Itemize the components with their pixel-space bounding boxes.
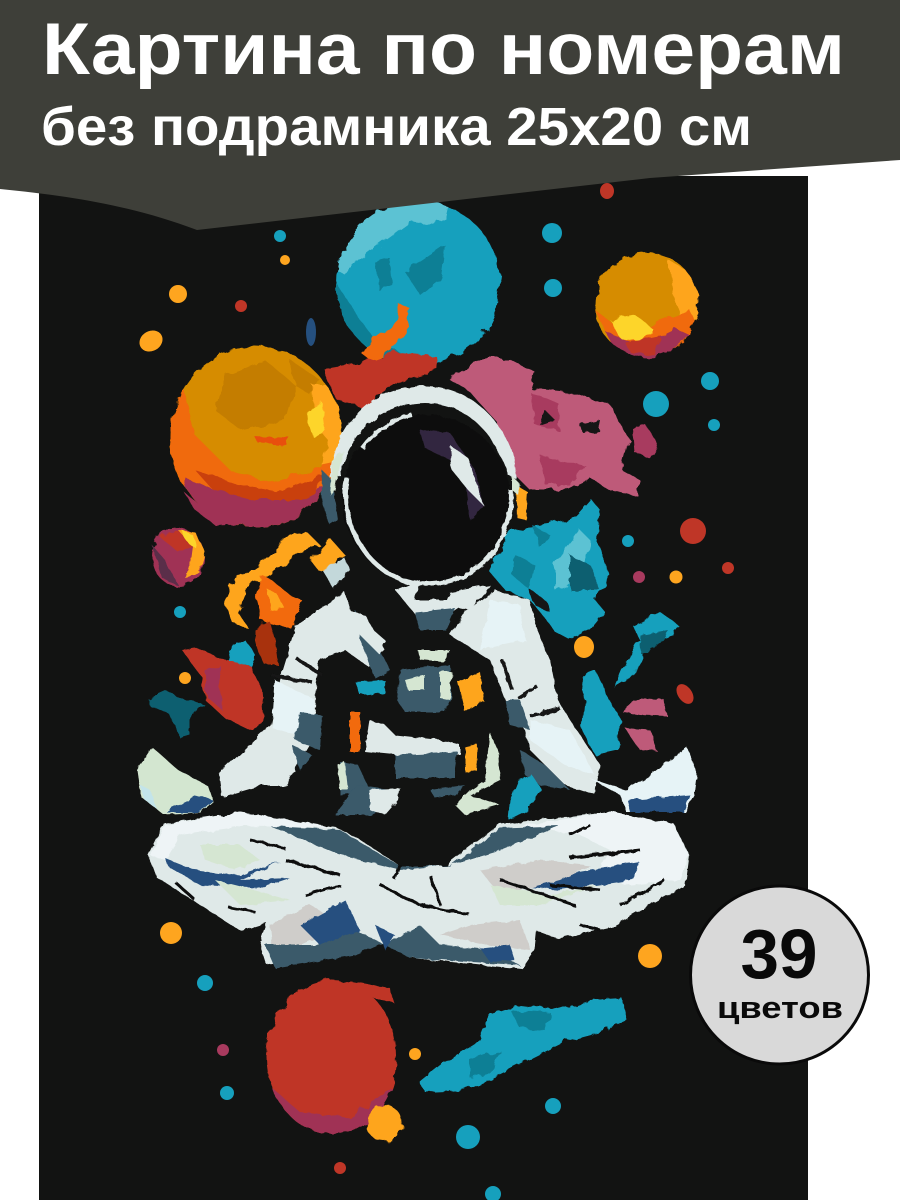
astronaut [137, 386, 698, 969]
nebula: orange left [225, 530, 345, 665]
planet: orange left [170, 344, 342, 528]
header banner [0, 0, 900, 230]
painting: black canvas [39, 176, 808, 1200]
helmet shell [321, 386, 528, 588]
leg highlights [150, 812, 688, 885]
red band under teal planet [323, 352, 438, 408]
arc over red planet [300, 980, 395, 1004]
crossed legs [148, 812, 689, 969]
neck ring [395, 580, 490, 620]
scattered paint dots [136, 183, 734, 1200]
visor glass [342, 415, 510, 583]
visor rim arc [346, 478, 511, 584]
right sleeve highlight [480, 600, 595, 775]
ear latch [516, 485, 528, 520]
nebula: pink right [622, 698, 667, 752]
foot grey patches [270, 905, 530, 950]
right sleeve shadow and dents [505, 700, 570, 790]
lower boots shadow [265, 925, 520, 968]
debris under orange planet [182, 490, 240, 525]
right arm and shoulder [450, 590, 600, 795]
visor reflection purple [420, 430, 484, 520]
right hand [589, 747, 698, 812]
left sleeve shadow and dents [292, 712, 322, 770]
left hand [137, 747, 213, 814]
boots blue [300, 900, 515, 962]
left sleeve highlight [272, 680, 315, 740]
badge caption: цветов [717, 990, 843, 1025]
nebula: teal bottom [420, 998, 627, 1092]
visor reflection white [450, 445, 484, 506]
badge: 39 colours [690, 886, 868, 1064]
teal patch on right side [508, 775, 542, 820]
visor top arc highlight [362, 415, 412, 448]
nebula: dark teal left [147, 690, 205, 738]
badge number: 39 [740, 915, 818, 993]
nebula: pink [448, 358, 658, 498]
creases [175, 825, 665, 930]
title: Картина по номерам [42, 9, 845, 90]
neck latch [322, 558, 350, 588]
belt shadow [270, 826, 560, 870]
planet: teal top [323, 195, 510, 408]
left knee blue streaks [165, 858, 290, 888]
moon: orange on red planet [366, 1105, 402, 1141]
nebula: teal right [490, 498, 610, 640]
left arm and shoulder [219, 592, 385, 797]
flare on teal planet [360, 305, 410, 362]
right knee blue streaks [505, 862, 640, 890]
planet: orange right [595, 252, 700, 360]
chest pack [335, 610, 500, 815]
highlight: yellow on orange planet [305, 402, 326, 436]
knee pale patches [200, 845, 290, 905]
planet: red bottom [260, 975, 405, 1141]
nebula: teal streaks right [582, 612, 678, 755]
neck shadow [415, 608, 455, 630]
artwork: planets and nebulae [147, 195, 705, 1141]
subtitle: без подрамника 25х20 см [41, 97, 752, 157]
planet: small left [152, 528, 205, 586]
nebula: red left [182, 640, 265, 730]
